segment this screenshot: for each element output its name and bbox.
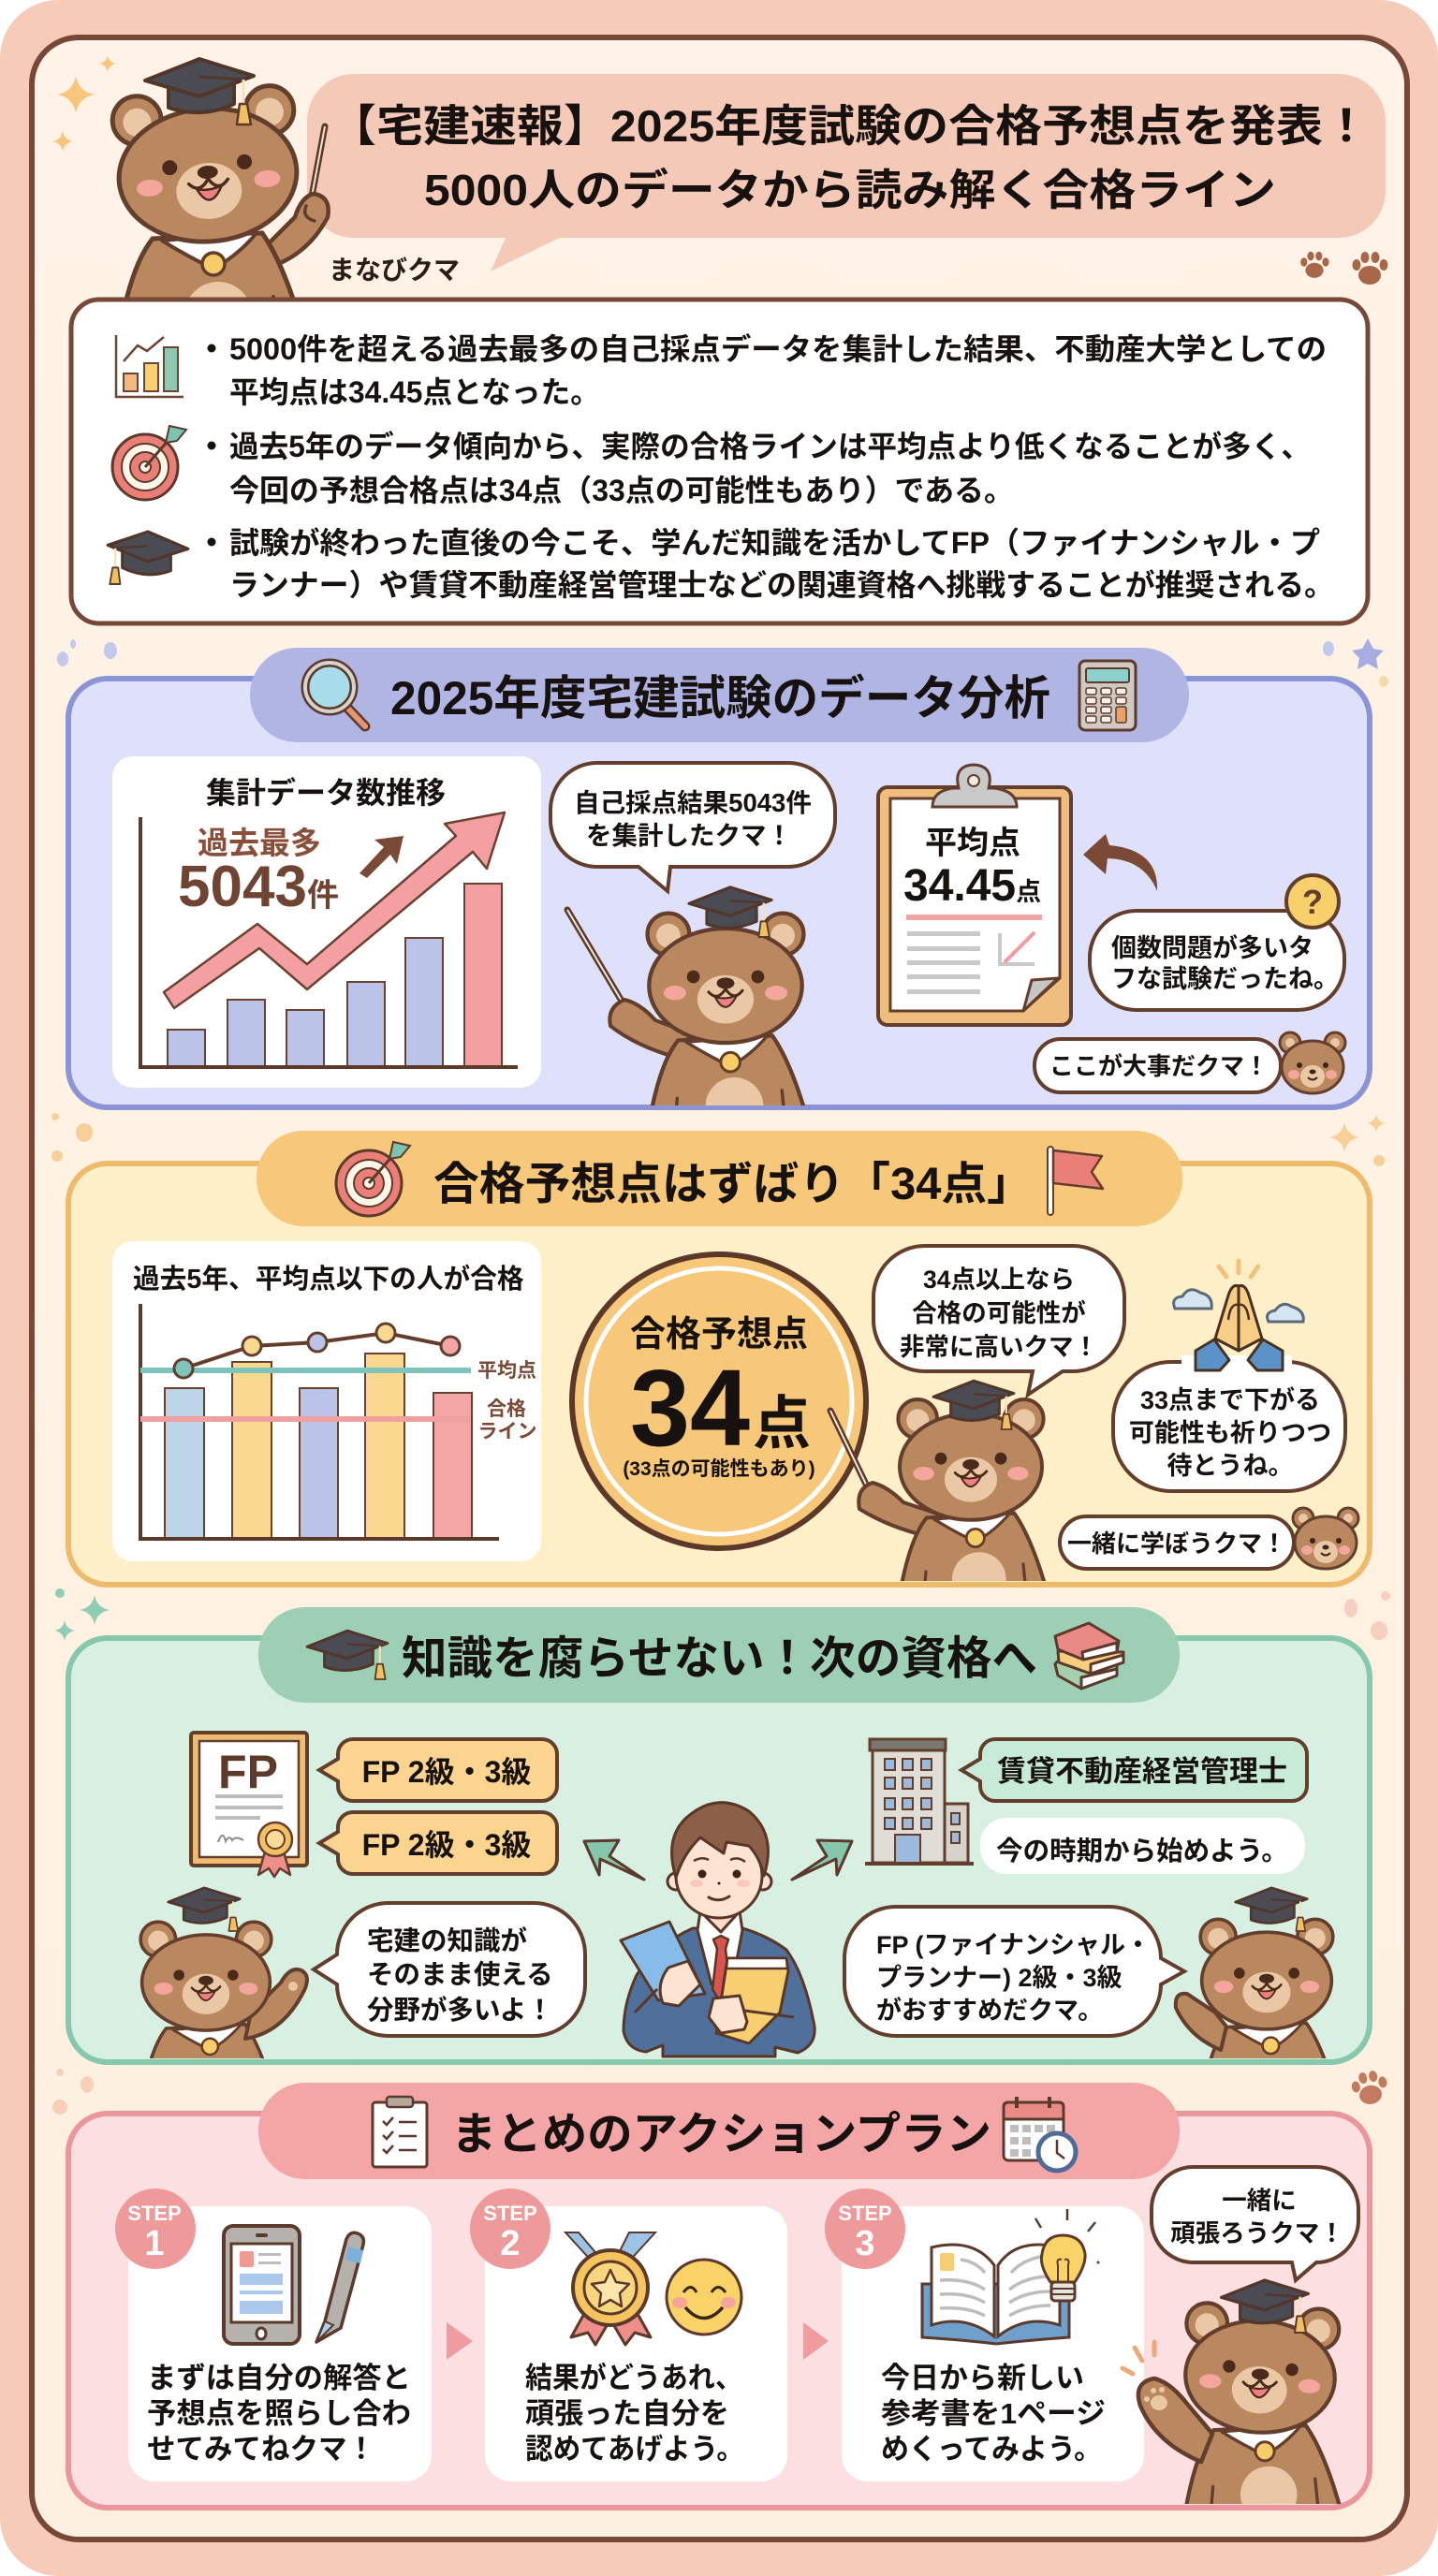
pass line [140, 1416, 471, 1422]
icon: light bulb [1035, 2209, 1099, 2301]
small bubble with mini bear [1034, 1032, 1345, 1093]
icon: building [865, 1739, 974, 1864]
panel: data analysis [68, 648, 1370, 1138]
bullet: data count [208, 332, 1327, 409]
shirt and neck [697, 1911, 742, 1984]
icon: target [112, 426, 186, 500]
step badge: STEP [483, 2202, 537, 2225]
clipboard: average score: 34.45点 [903, 861, 1041, 911]
speech bubble: knowledge reuse: そのまま使える [367, 1960, 553, 1990]
clipboard: average score [878, 765, 1071, 1025]
bullet: next qualification [208, 526, 1334, 602]
speech bubble: knowledge reuse [314, 1903, 585, 2036]
speech bubble: 34 points [873, 1246, 1124, 1395]
big score circle: 合格予想点 [630, 1315, 808, 1354]
blue book [621, 1922, 705, 2000]
bullet: data count: 5000件を超える過去最多の自己採点データを集計した結果、不動産大学としての [229, 332, 1327, 366]
speech bubble: let's do our best [1152, 2167, 1358, 2280]
big score circle: 34 [630, 1347, 750, 1469]
speech bubble: FP recommendation: がおすすめだクマ。 [876, 1996, 1103, 2025]
icon: checklist [373, 2097, 427, 2167]
icon: calendar and clock [1004, 2097, 1076, 2171]
speech bubble: 34 points: 非常に高いクマ！ [900, 1333, 1098, 1361]
heading pill [258, 2083, 1180, 2179]
step text: 頑張った自分を [525, 2397, 729, 2430]
step text: めくってみよう。 [881, 2433, 1102, 2466]
icon: graduation cap [108, 532, 188, 584]
icon: flag [1048, 1147, 1103, 1215]
note: start now: 今の時期から始めよう。 [996, 1837, 1288, 1866]
speech bubble: FP recommendation [844, 1907, 1184, 2036]
step text: まずは自分の解答と [147, 2362, 411, 2394]
tag: FP: FP 2級・3級 [362, 1755, 531, 1789]
score trend [174, 1324, 460, 1378]
icon: question badge: ? [1302, 883, 1323, 921]
tie [712, 1936, 730, 2003]
ears [668, 1873, 684, 1890]
icon: open book [922, 2245, 1069, 2344]
step badge [825, 2188, 905, 2269]
arrow: step 2 to 3 [803, 2322, 829, 2360]
arrow: toward FP [584, 1840, 644, 1880]
small bubble with mini bear: 一緒に学ぼうクマ！ [1067, 1530, 1286, 1558]
student figure [621, 1803, 814, 2056]
heading pill [257, 1131, 1182, 1226]
icon: target [336, 1142, 410, 1216]
panel: predicted score [68, 1131, 1370, 1609]
arrow: toward rental manager [792, 1840, 852, 1880]
clipboard: average score: 平均点 [925, 826, 1020, 861]
paw pads [1144, 2387, 1167, 2410]
step badge: 3 [855, 2224, 875, 2263]
heading pill: 2025年度宅建試験のデータ分析 [390, 672, 1050, 724]
heading pill: 知識を腐らせない！次の資格へ [402, 1633, 1037, 1684]
speech bubble: 34 points: 合格の可能性が [912, 1299, 1086, 1327]
mascot bear with pointer [828, 1380, 1047, 1581]
bullet: next qualification: 試験が終わった直後の今こそ、学んだ知識を活かしてFP（ファイナンシャル・プ [229, 526, 1320, 560]
icon: question badge [1286, 875, 1339, 928]
bullet: pass line: 過去5年のデータ傾向から、実際の合格ラインは平均点より低くなることが多く、 [229, 430, 1311, 463]
mascot name: まなびクマ [329, 256, 460, 285]
icon: magnifier [305, 663, 365, 726]
icon: medal [565, 2232, 655, 2345]
tag: FP [319, 1739, 557, 1801]
speech bubble: 33 points: 可能性も祈りつつ [1129, 1419, 1331, 1447]
bars [165, 1354, 472, 1539]
bullet: pass line [208, 430, 1311, 507]
line labels: ライン [477, 1421, 537, 1442]
bullet: next qualification: ランナー）や賃貸不動産経営管理士などの関連資格へ挑戦することが推奨される。 [229, 568, 1334, 602]
certificate: FP [218, 1746, 278, 1798]
card: step 1 [115, 2188, 432, 2481]
heading pill: まとめのアクションプラン [451, 2110, 991, 2159]
step text: 予想点を照らし合わ [147, 2397, 411, 2430]
chart card: data count trend [112, 756, 541, 1088]
title speech bubble [307, 74, 1386, 271]
bear waving right [1174, 1887, 1335, 2058]
speech bubble: knowledge reuse: 宅建の知識が [367, 1925, 527, 1956]
speech bubble: let's do our best: 頑張ろうクマ！ [1170, 2219, 1344, 2247]
speech bubble: tough exam [1090, 911, 1344, 1010]
hand left [660, 1961, 700, 2006]
step text: 結果がどうあれ、 [525, 2362, 742, 2394]
clip [932, 765, 1017, 807]
step badge [470, 2188, 550, 2269]
decoration: top sparkles [52, 55, 116, 152]
icon: bar chart [116, 335, 183, 397]
mascot bear waving [1138, 2280, 1345, 2526]
tag: FP second: FP 2級・3級 [362, 1828, 531, 1862]
record count label [178, 826, 339, 919]
yellow book [716, 1958, 788, 2043]
jacket [624, 1928, 814, 2056]
small bubble with mini bear: ここが大事だクマ！ [1049, 1052, 1269, 1080]
bars [168, 884, 502, 1067]
trend arrow [164, 812, 505, 1008]
title: 【宅建速報】2025年度試験の合格予想点を発表！ [330, 101, 1370, 151]
hand right [709, 1996, 747, 2033]
decoration: paw prints [1300, 252, 1387, 285]
step text [525, 2362, 744, 2466]
big score circle: 点 [753, 1392, 811, 1456]
record count label: 5043件 [178, 855, 339, 919]
icon: graduation cap [307, 1631, 388, 1679]
bear waving left [139, 1887, 309, 2058]
mascot: manabi bear pointing [110, 57, 330, 298]
mascot bear with pointer [564, 886, 806, 1105]
arrow: step 1 to 2 [447, 2322, 473, 2360]
step badge: STEP [838, 2202, 892, 2225]
sleeve seams [635, 1989, 794, 2017]
card: step 2 [470, 2188, 787, 2481]
step text: 認めてあげよう。 [525, 2433, 744, 2466]
icon: smiley [667, 2260, 741, 2334]
speech bubble: FP recommendation: プランナー) 2級・3級 [876, 1964, 1123, 1992]
bullet: pass line: 今回の予想合格点は34点（33点の可能性もあり）である。 [229, 474, 1014, 507]
panel: next qualification [68, 1607, 1370, 2111]
tag: FP second [319, 1812, 557, 1874]
decoration: pink dots and paw [52, 2069, 1390, 2115]
heading pill: 合格予想点はずばり「34点」 [433, 1160, 1033, 1209]
title [330, 101, 1370, 214]
speech bubble: knowledge reuse: 分野が多いよ！ [367, 1995, 553, 2026]
tag: rental manager [961, 1739, 1307, 1801]
face details [690, 1858, 750, 1900]
average line [140, 1368, 471, 1373]
line labels: 平均点 [477, 1360, 536, 1382]
certificate [191, 1733, 307, 1877]
title: 5000人のデータから読み解く合格ライン [424, 166, 1276, 214]
speech bubble: let's do our best: 一緒に [1222, 2187, 1297, 2215]
chart card: past five years [112, 1241, 541, 1561]
small brown arrow [360, 836, 404, 878]
curved arrow to clipboard [1083, 834, 1157, 891]
record count label: 過去最多 [198, 826, 321, 860]
step text [147, 2362, 411, 2466]
speech bubble: 33 points: 33点まで下がる [1140, 1385, 1320, 1414]
decoration: lavender dots and star [57, 638, 1388, 687]
panel: summary [71, 300, 1368, 623]
icon: phone and pen [224, 2226, 363, 2344]
heading pill [258, 1607, 1180, 1703]
panel: action plan [68, 2083, 1370, 2526]
icon: calculator [1079, 661, 1136, 730]
excitement marks [1123, 2342, 1154, 2374]
step badge: STEP [127, 2202, 182, 2225]
step text [881, 2362, 1106, 2466]
chart card: data count trend: 集計データ数推移 [206, 776, 446, 810]
speech bubble: tough exam: フな試験だったね。 [1111, 965, 1339, 993]
icon: praying hands [1174, 1261, 1303, 1370]
small bubble with mini bear [1060, 1508, 1358, 1569]
step badge [115, 2188, 196, 2269]
step text: せてみてねクマ！ [147, 2433, 375, 2466]
step text: 参考書を1ページ [881, 2397, 1106, 2430]
card: step 3 [825, 2188, 1144, 2481]
speech bubble: 5043 results: を集計したクマ！ [586, 821, 792, 850]
big score circle: (33点の可能性もあり) [623, 1458, 815, 1480]
heading pill [250, 648, 1189, 742]
speech bubble: 5043 results: 自己採点結果5043件 [574, 788, 812, 817]
big score circle [572, 1254, 866, 1548]
speech bubble: 34 points: 34点以上なら [923, 1266, 1075, 1294]
note: start now [980, 1818, 1305, 1874]
hair [672, 1803, 768, 1878]
line labels: 合格 [487, 1398, 526, 1420]
speech bubble: 33 points [1113, 1355, 1345, 1491]
chart card: past five years: 過去5年、平均点以下の人が合格 [133, 1264, 524, 1295]
speech bubble: FP recommendation: FP (ファイナンシャル・ [876, 1931, 1151, 1959]
decoration: orange dots and sparkles [51, 1113, 1386, 1166]
speech bubble: 5043 results [550, 763, 835, 891]
line labels [477, 1360, 537, 1442]
decoration: green sparkles and pink dots [54, 1588, 1390, 1641]
icon: stacked books [1055, 1623, 1123, 1689]
step text: 今日から新しい [881, 2362, 1084, 2394]
speech bubble: tough exam: 個数問題が多いタ [1111, 933, 1313, 962]
step badge: 2 [500, 2224, 521, 2263]
face [676, 1834, 762, 1918]
bullet: data count: 平均点は34.45点となった。 [229, 375, 600, 409]
speech bubble: 33 points: 待とうね。 [1167, 1452, 1294, 1480]
tag: rental manager: 賃貸不動産経営管理士 [997, 1755, 1287, 1788]
step badge: 1 [144, 2224, 165, 2263]
